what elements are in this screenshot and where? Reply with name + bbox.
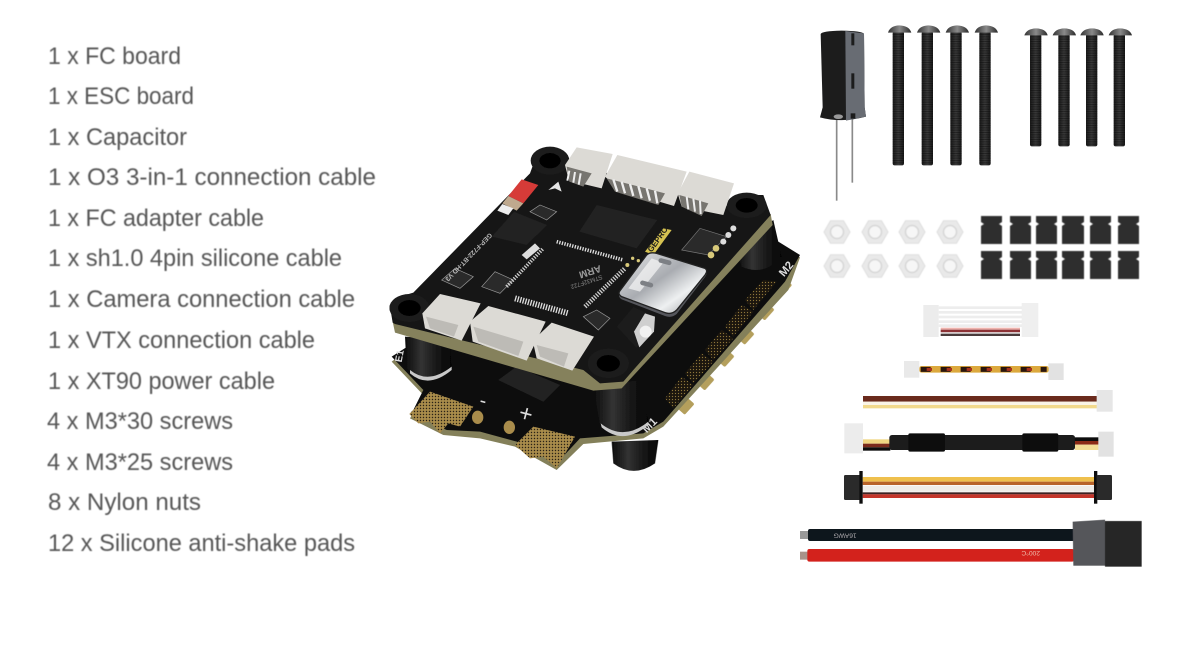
ESC labels: M1 — [640, 416, 660, 435]
FC adapter twisted cable — [904, 361, 1064, 380]
parts list text: 1 x Camera connection cable — [48, 286, 355, 313]
ESC labels: + — [516, 399, 536, 428]
ESC board — [392, 242, 800, 470]
capacitor stripe — [845, 31, 866, 121]
short M3x25 screws — [1024, 28, 1132, 146]
ESC labels: M2 — [777, 259, 796, 279]
cables — [800, 303, 1142, 567]
capacitor leads — [837, 119, 852, 201]
ESC labels: - — [477, 390, 489, 413]
main MCU chip — [507, 242, 625, 313]
capacitor body — [820, 31, 866, 120]
parts list text: 4 x M3*30 screws — [47, 408, 233, 435]
arrow marker — [548, 182, 562, 192]
board model label: GEP-F722-BT-HD V3 — [443, 231, 493, 282]
ESC motor teeth — [675, 276, 792, 415]
standoffs — [405, 220, 782, 436]
push button — [617, 307, 655, 348]
ESC gold solder pads right — [515, 427, 575, 468]
chip label: ARM — [577, 262, 602, 280]
USB-C slots — [640, 258, 672, 288]
small components — [442, 205, 727, 330]
camera connection cable — [844, 423, 1114, 457]
ESC MOSFET — [498, 367, 560, 402]
parts list text: 1 x XT90 power cable — [48, 368, 275, 395]
GEPRC badge: GEPRC — [646, 225, 670, 254]
nylon nuts — [824, 221, 963, 277]
FC board top face — [390, 150, 771, 383]
silicone anti-shake pads — [981, 216, 1139, 279]
parts list text: 1 x VTX connection cable — [48, 327, 315, 354]
long M3x30 screws — [888, 25, 998, 165]
USB-C port — [619, 253, 707, 317]
ESC gold solder pads left — [409, 392, 473, 433]
main MCU chip: STM32F722 — [569, 273, 603, 289]
parts list text: 12 x Silicone anti-shake pads — [48, 530, 355, 557]
left chip — [492, 212, 547, 245]
capacitor — [820, 31, 866, 201]
XT90 power cable — [800, 520, 1142, 567]
XT90 power cable: 16AWG — [834, 532, 857, 539]
mounting holes — [389, 147, 767, 378]
parts list text: 1 x FC adapter cable — [48, 205, 264, 232]
XT90 power cable: 200°C — [1021, 549, 1040, 557]
upper chip — [579, 205, 657, 248]
O3 3-in-1 cable — [923, 303, 1038, 337]
top connectors — [565, 147, 734, 216]
bottom connectors — [422, 294, 594, 371]
parts list text: 1 x O3 3-in-1 connection cable — [48, 164, 376, 191]
parts list text: 1 x FC board — [48, 43, 181, 70]
ESC labels: E1 — [394, 349, 407, 363]
flight controller stack — [389, 147, 800, 471]
parts list text: 1 x ESC board — [48, 83, 194, 110]
ESC center pads — [472, 411, 515, 434]
sh1.0 silicone cable — [863, 390, 1113, 412]
parts list text: 4 x M3*25 screws — [47, 449, 233, 476]
parts list text: 1 x sh1.0 4pin silicone cable — [48, 245, 342, 272]
FC board edge — [393, 214, 773, 391]
bottom standoff — [612, 440, 658, 471]
parts list text — [47, 43, 376, 557]
ESC labels — [394, 259, 796, 435]
parts list text: 8 x Nylon nuts — [48, 489, 201, 516]
red LED pad — [497, 179, 538, 215]
solder dots — [625, 225, 736, 267]
parts list text: 1 x Capacitor — [48, 124, 187, 151]
ESC motor pads — [665, 280, 777, 408]
VTX connection cable — [844, 471, 1112, 504]
